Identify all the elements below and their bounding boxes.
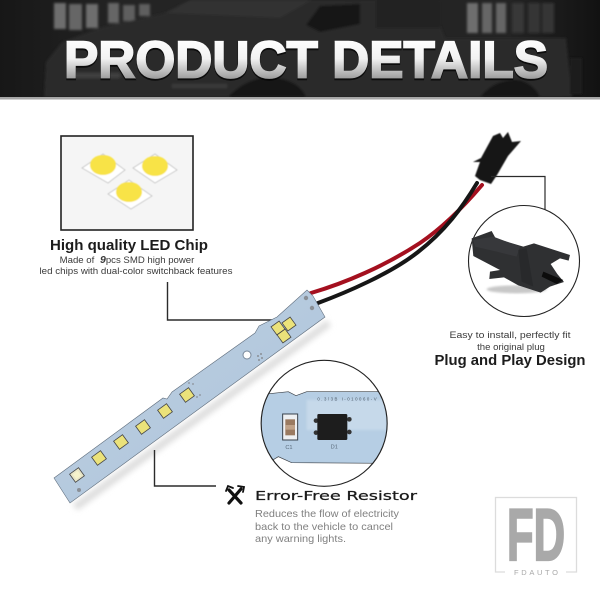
text block: plug caption bbox=[434, 330, 586, 369]
callout line: resistor bbox=[154, 450, 216, 486]
logo frame bbox=[496, 498, 576, 572]
LED 3 bbox=[114, 435, 128, 449]
solder pads bbox=[77, 296, 314, 492]
panel: LED chip image bbox=[61, 136, 193, 230]
LED 4 bbox=[136, 420, 150, 434]
title: PRODUCT DETAILS: PRODUCT DETAILS bbox=[64, 32, 548, 90]
circle outline bbox=[468, 206, 580, 316]
circle outline bbox=[261, 360, 387, 486]
callout line: LED chip bbox=[168, 282, 278, 320]
text block: LED chip caption bbox=[40, 238, 233, 277]
connector plug on wire end bbox=[473, 132, 521, 184]
description bbox=[255, 509, 400, 545]
heading: Plug and Play Design: Plug and Play Design bbox=[434, 353, 586, 369]
title: PRODUCT DETAILS: PRODUCT DETAILS bbox=[64, 33, 548, 91]
heading: Error-Free Resistor: Error-Free Resistor bbox=[255, 488, 418, 503]
panel: resistor close-up circle bbox=[257, 360, 390, 486]
photo contents bbox=[257, 392, 390, 463]
wires bbox=[311, 183, 482, 303]
LED 6 bbox=[180, 388, 194, 402]
board shadow bbox=[72, 320, 331, 510]
photo contents: 0.3/3B I-010060-V bbox=[317, 397, 377, 402]
LED 2 bbox=[92, 451, 106, 465]
logo wordmark: FDAUTO bbox=[514, 568, 558, 577]
description line 1: Easy to install, perfectly fit bbox=[450, 330, 571, 341]
red wire bbox=[311, 185, 482, 293]
watermark logo: FD FDAUTO bbox=[496, 495, 576, 577]
description line 2: led chips with dual-color switchback features bbox=[40, 266, 233, 277]
black wire bbox=[318, 183, 477, 303]
grey rule under banner bbox=[0, 97, 600, 100]
LED circuit board strip bbox=[54, 290, 331, 510]
truck photo background bbox=[0, 0, 600, 97]
panel: plug close-up circle bbox=[468, 206, 580, 316]
photo contents: C1 bbox=[285, 445, 293, 451]
LED chip 2 bbox=[133, 154, 177, 183]
LED chip 1 bbox=[82, 154, 125, 183]
LED 1 bbox=[70, 468, 84, 482]
text block: resistor caption bbox=[255, 488, 418, 545]
mounting hole bbox=[243, 351, 251, 359]
heading: High quality LED Chip: High quality LED Chip bbox=[50, 238, 208, 254]
description: any warning lights. bbox=[255, 534, 346, 545]
LED cluster of three bbox=[271, 317, 296, 343]
description line 2: the original plug bbox=[477, 342, 545, 353]
photo contents: D1 bbox=[331, 444, 338, 450]
LED 5 bbox=[158, 404, 172, 418]
board body bbox=[54, 290, 325, 503]
circle fill bbox=[261, 360, 387, 486]
description: Reduces the flow of electricity bbox=[255, 509, 400, 520]
plug photo bbox=[472, 231, 570, 293]
description: back to the vehicle to cancel bbox=[255, 522, 393, 533]
LED chip 3 bbox=[108, 180, 152, 209]
header banner bbox=[0, 0, 600, 100]
callout line: plug bbox=[491, 176, 545, 210]
image frame bbox=[61, 136, 193, 230]
description line 1: Made of 9pcs SMD high power bbox=[60, 254, 195, 266]
icon: crossed tools bbox=[226, 486, 244, 503]
